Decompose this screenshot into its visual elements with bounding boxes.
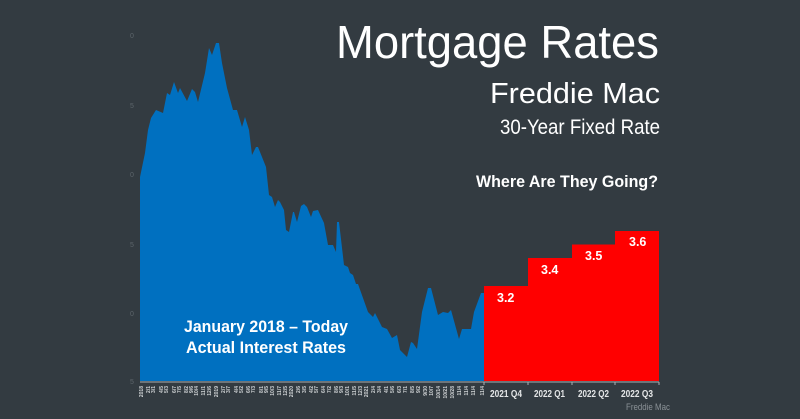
x-axis date labels: 11/4 (457, 386, 463, 395)
forecast value labels: 3.5 (585, 249, 602, 263)
chart caption (184, 317, 349, 357)
x-axis date labels: 3/5 (302, 386, 308, 393)
x-axis date labels: 10/28 (450, 386, 456, 399)
x-axis date labels: 4/1 (384, 386, 390, 393)
subtitle: rate type: 30-Year Fixed Rate (500, 116, 660, 139)
x-axis date labels: 6/3 (397, 386, 403, 393)
x-axis date labels: 11/4 (471, 386, 477, 395)
y-axis labels: 0 (130, 311, 134, 318)
question heading: Where Are They Going? (476, 172, 658, 191)
x-axis date labels: 4/5 (159, 386, 165, 393)
x-axis date labels: 2/7 (221, 386, 227, 393)
x-axis date labels: 10/1 (345, 386, 351, 396)
x-axis date labels: 3/1 (151, 386, 157, 393)
y-axis labels: 5 (130, 103, 134, 110)
x-axis date labels: 2019 (214, 386, 220, 397)
x-axis line (140, 382, 659, 385)
x-axis date labels: 7/3 (251, 386, 257, 393)
x-axis date labels: 11/5 (352, 386, 358, 395)
x-axis date labels: 9/3 (339, 386, 345, 393)
x-axis date labels: 5/2 (239, 386, 245, 393)
x-axis date labels: 8/6 (334, 386, 340, 393)
x-axis date labels: 10/14 (436, 386, 442, 399)
x-axis date labels: 5/3 (164, 386, 170, 393)
x-axis date labels: 2018 (139, 386, 145, 397)
x-axis date labels: 2021 (364, 386, 370, 397)
x-axis date labels (139, 386, 486, 399)
quarter labels: 2022 Q2 (578, 389, 609, 400)
forecast value labels: 3.2 (497, 291, 514, 305)
x-axis date labels: 11/7 (277, 386, 283, 395)
source note: Freddie Mac (626, 402, 670, 413)
x-axis date labels: 6/7 (172, 386, 178, 393)
x-axis date labels: 6/6 (246, 386, 252, 393)
forecast value labels: 3.6 (629, 235, 646, 249)
y-axis labels (130, 33, 134, 386)
x-axis date labels: 11/4 (464, 386, 470, 395)
x-axis date labels: 2/4 (371, 386, 377, 393)
quarter labels (490, 389, 653, 400)
x-axis date labels: 8/1 (259, 386, 265, 393)
x-axis date labels: 2/6 (296, 386, 302, 393)
chart caption: January 2018 – Today (184, 317, 349, 336)
x-axis date labels: 4/4 (234, 386, 240, 393)
forecast value labels (497, 235, 646, 305)
x-axis date labels: 2020 (289, 386, 295, 397)
x-axis date labels: 3/4 (377, 386, 383, 393)
x-axis date labels: 6/4 (321, 386, 327, 393)
x-axis date labels: 8/2 (184, 386, 190, 393)
x-axis date labels: 10/7 (429, 386, 435, 396)
x-axis date labels: 9/5 (264, 386, 270, 393)
y-axis labels: 5 (130, 242, 134, 249)
x-axis date labels: 8/5 (410, 386, 416, 393)
x-axis date labels: 11/1 (201, 386, 207, 395)
y-axis labels: 0 (130, 172, 134, 179)
area chart: actual interest rates (140, 43, 484, 381)
x-axis date labels: 12/3 (358, 386, 364, 396)
x-axis date labels: 7/5 (177, 386, 183, 393)
x-axis date labels: 11/4 (480, 386, 486, 395)
x-axis date labels: 2/1 (146, 386, 152, 393)
x-axis date labels: 12/6 (207, 386, 213, 396)
subtitle: source: Freddie Mac (490, 78, 660, 110)
x-axis date labels: 10/4 (194, 386, 200, 396)
x-axis date labels: 5/6 (390, 386, 396, 393)
x-axis date labels: 3/7 (226, 386, 232, 393)
x-axis date labels: 5/7 (314, 386, 320, 393)
bar chart: forecast rates (484, 231, 659, 381)
quarter labels: 2022 Q3 (621, 389, 653, 400)
x-axis date labels: 12/5 (283, 386, 289, 396)
x-axis date labels: 10/21 (443, 386, 449, 399)
x-axis date labels: 7/1 (403, 386, 409, 393)
x-axis date labels: 9/6 (189, 386, 195, 393)
y-axis labels: 0 (130, 33, 134, 40)
x-axis date labels: 7/2 (327, 386, 333, 393)
x-axis date labels: 9/30 (423, 386, 429, 396)
quarter labels: 2021 Q4 (490, 389, 522, 400)
x-axis date labels: 10/3 (270, 386, 276, 396)
forecast value labels: 3.4 (541, 263, 558, 277)
title: Mortgage Rates (336, 16, 659, 68)
x-axis date labels: 9/2 (416, 386, 422, 393)
y-axis labels: 5 (130, 379, 134, 386)
chart caption: Actual Interest Rates (186, 338, 346, 357)
quarter labels: 2022 Q1 (534, 389, 565, 400)
x-axis date labels: 4/2 (309, 386, 315, 393)
